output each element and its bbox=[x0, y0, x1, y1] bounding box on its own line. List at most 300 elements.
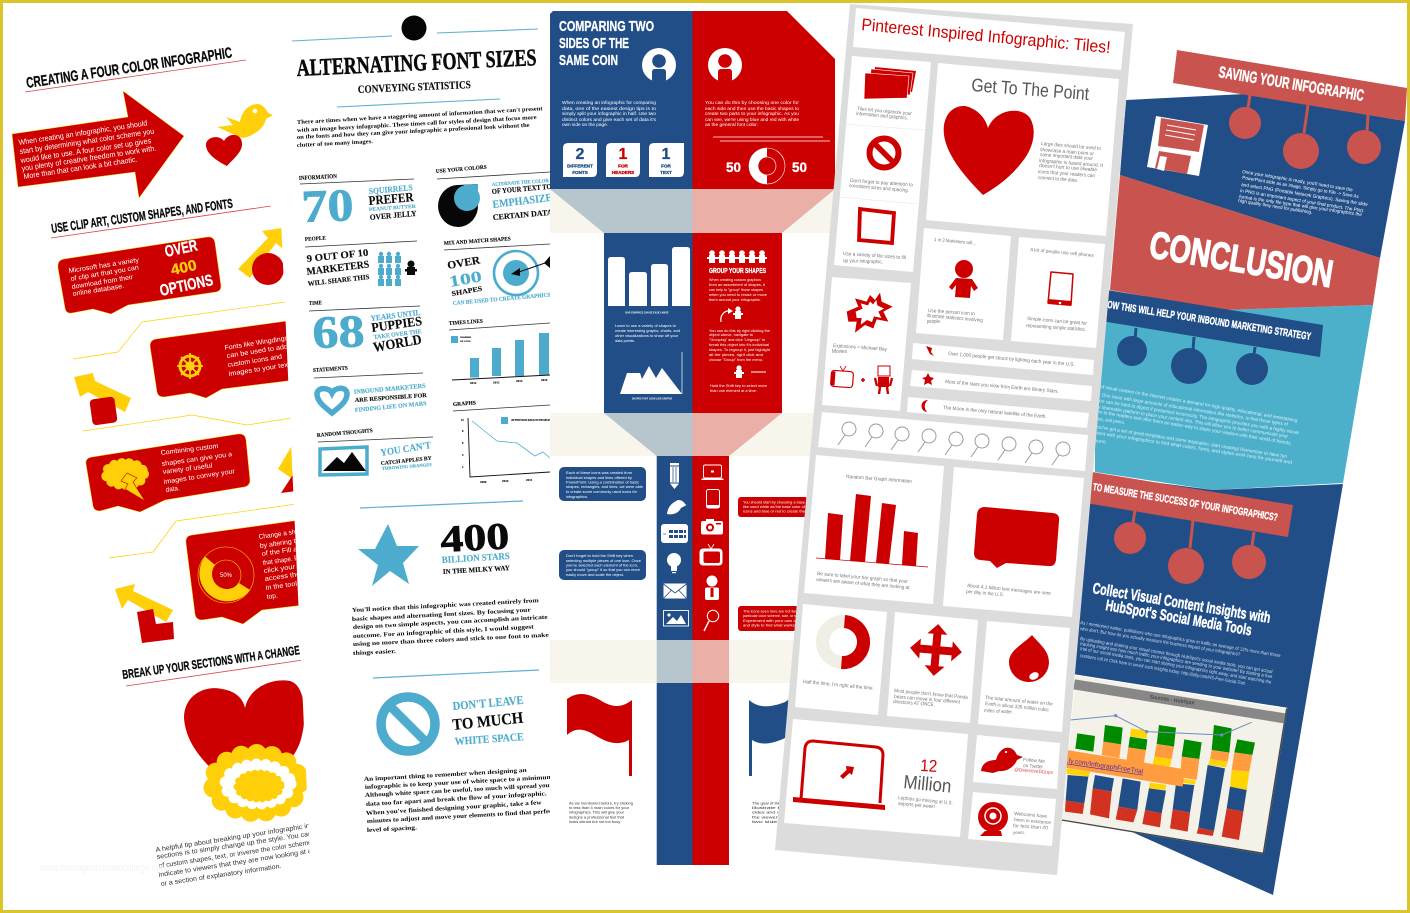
section: information 70: PEANUT BUTTER bbox=[369, 205, 416, 213]
icon: user bbox=[642, 48, 676, 82]
tile: cell phones: Simple icons can be great for bbox=[1027, 316, 1087, 327]
icon: tablet bbox=[706, 490, 720, 508]
red segments bbox=[1065, 788, 1243, 840]
icon: black person bbox=[405, 260, 417, 275]
callout: clip art options: download from their bbox=[71, 274, 134, 291]
icon: target with arrow bbox=[494, 251, 550, 295]
callout: fill and outline bbox=[186, 520, 311, 624]
section: use your colors: CERTAIN DATA bbox=[492, 208, 553, 222]
callout: custom shapes bbox=[86, 434, 250, 512]
callout: red base color note: icons and blue or red to create the bbox=[743, 510, 805, 514]
text block: shapes: other visualizations to show off your bbox=[615, 333, 679, 338]
tile: half donut bbox=[795, 604, 887, 715]
tile: twitter bird: on Twitter bbox=[1023, 763, 1044, 770]
tile: laptops: 12 bbox=[920, 756, 938, 776]
mid panel: red group your shapes: than one element at a time. bbox=[710, 388, 757, 393]
tile: moon fact bbox=[907, 397, 1089, 428]
tile: moon fact: The Moon is the only natural satellite of the Earth. bbox=[943, 405, 1047, 420]
panel: saving your infographic sheet bbox=[1043, 50, 1407, 895]
chart: 50/50 donut: 50 bbox=[726, 159, 741, 175]
tiles: fonts counts: 2 bbox=[576, 146, 585, 163]
text block: hubspot: trial of our social media tools, you can start sharing your infographics right away, and start watching the bbox=[1080, 646, 1272, 686]
icon: picture bbox=[664, 610, 688, 626]
bar chart: times lines: 2014 bbox=[516, 379, 523, 383]
text block: left footer: to less than 4 main colors for your bbox=[569, 806, 630, 810]
mid panel: red group your shapes: Hold the Shift key to select more bbox=[710, 383, 767, 388]
title: comparing two sides: COMPARING TWO bbox=[559, 18, 654, 35]
section: statements bbox=[313, 366, 428, 414]
tile: get to the point: some important data your bbox=[1040, 152, 1093, 162]
callout: blue icons note: individual shapes and lines offered by bbox=[566, 476, 632, 480]
tiles: fonts counts bbox=[563, 143, 684, 177]
tiles: fonts counts: HEADERS bbox=[612, 170, 634, 175]
icon: magnifier bbox=[704, 610, 719, 631]
section: information 70: SQUIRRELS bbox=[368, 182, 413, 196]
text block: saving bbox=[1238, 169, 1368, 218]
tile: water drop: Earth is about 326 million cubic bbox=[985, 701, 1050, 714]
callout: blue shift key note: easily move and scale the object. bbox=[566, 573, 624, 577]
icon: laptop bbox=[702, 465, 724, 480]
text block: basic shapes note: basic shapes and alternating font sizes. By focusing your bbox=[352, 607, 531, 623]
section: information 70: PREFER bbox=[368, 189, 415, 208]
text block: inbound strategy: ly shareable platform to place your content into. This will allow you to better communicate your bbox=[1097, 404, 1289, 440]
icon: pencil bbox=[670, 463, 679, 489]
heading: collect visual content insights bbox=[1091, 580, 1272, 639]
callout: clip art options: online database. bbox=[72, 283, 125, 298]
text block: shapes bbox=[615, 323, 680, 343]
stat: don't leave too much white space bbox=[452, 693, 525, 748]
tile: webcam: for less than 20 bbox=[1013, 823, 1049, 831]
text block: inbound strategy: ment with your infographics to find what colors, fonts, and styles work best for yourself and bbox=[1094, 430, 1293, 466]
orange link banner bbox=[1043, 750, 1185, 787]
red circles with stems bbox=[1229, 95, 1381, 169]
icon: television bbox=[700, 544, 722, 565]
line chart: graphs: 2 bbox=[462, 466, 464, 469]
callout: fill and outline: Change a shape bbox=[258, 527, 307, 541]
text block: inbound strategy: you've got a set of great templates and some inspiration, start creating! Remember to have fun bbox=[1095, 424, 1288, 460]
icon: stacked cards bbox=[864, 67, 916, 99]
bar chart: times lines: TIMES LINES bbox=[449, 319, 483, 327]
tile: text messages: per day in the U.S. bbox=[966, 589, 1004, 598]
tile: four way arrow: directions AT ONCE. bbox=[893, 699, 935, 708]
text block: inbound strategy: . One issue with large amounts of educational information like statistics, is that these types of bbox=[1099, 392, 1289, 428]
text block: hubspot bbox=[1080, 620, 1281, 687]
icon: clipped yellow and red shape bbox=[278, 446, 294, 493]
text block: right footer: The goal of this infographic is to bbox=[752, 802, 812, 806]
banner: saving your infographic bbox=[1173, 50, 1407, 121]
icon: calendar: 31 bbox=[663, 532, 667, 536]
tile: water drop bbox=[978, 621, 1070, 732]
text block: blue intro: data, one of the easiest design tips is to bbox=[562, 106, 656, 112]
trend line bbox=[1070, 714, 1252, 737]
subtitle: conveying statistics: CONVEYING STATISTICS bbox=[358, 79, 471, 96]
section: random thoughts: YOU CAN'T bbox=[380, 440, 432, 459]
section: time 68: WORLD bbox=[372, 333, 423, 356]
tile: half donut: Half the time, I'm right all the time. bbox=[803, 679, 874, 692]
banner: measure the success bbox=[1068, 468, 1293, 537]
tile: marketers person: people. bbox=[927, 319, 941, 325]
icon: light bulb bbox=[667, 553, 681, 573]
orange link banner: http://bit.ly.com/InfographFreeTrial bbox=[1043, 754, 1144, 776]
chart header bbox=[1073, 679, 1285, 723]
text block: hubspot: numbers roll in! Click here to unveil such insights today: http://bitly.com/HS-Free-Social-Tool bbox=[1080, 653, 1245, 687]
section: statements: INBOUND MARKETERS bbox=[354, 383, 426, 396]
title: comparing two sides: SAME COIN bbox=[559, 52, 618, 69]
callout: blue shift key note: you should "group" it so that you can more bbox=[566, 568, 640, 572]
section: people: 9 OUT OF 10 bbox=[306, 248, 369, 265]
icon: no sign bbox=[381, 697, 435, 751]
stat: don't leave too much white space: WHITE SPACE bbox=[454, 731, 524, 748]
callout: fill and outline: that shape. Right bbox=[262, 554, 309, 567]
text block: shapes: Learn to use a variety of shapes to bbox=[615, 323, 676, 328]
section: time 68 bbox=[308, 300, 422, 352]
line chart: graphs: 4 bbox=[462, 454, 464, 457]
callout: wingdings fonts: Fonts like Wingdings bbox=[224, 335, 289, 352]
icon: calendar bbox=[661, 524, 688, 543]
callout: wingdings fonts: can be used to add bbox=[226, 343, 289, 360]
section: random thoughts: THROWING ORANGES bbox=[382, 462, 432, 471]
section: time 68: PUPPIES bbox=[370, 313, 423, 335]
callout: blue shift key note bbox=[559, 550, 646, 580]
icon: tv plus robot bbox=[830, 366, 892, 394]
text block: inbound strategy: ion can be hard to digest if presented incorrectly. The infographic provides you with a highly visual bbox=[1098, 398, 1299, 436]
red arrow callout bbox=[12, 91, 184, 198]
callout: blue icons note: infographics. bbox=[566, 495, 588, 499]
callout: blue icons note: to create some commonly used icons for bbox=[566, 490, 638, 494]
tile: title bbox=[853, 8, 1125, 70]
tile: stars fact bbox=[910, 370, 1092, 401]
callout: blue icons note: Each of these icons was created from bbox=[566, 471, 632, 475]
text block: inbound strategy bbox=[1093, 384, 1299, 466]
tile: get to the point: infographic is based around. It bbox=[1039, 158, 1104, 169]
chart header: Sources - HubSpot bbox=[1149, 694, 1195, 707]
line chart: graphs: 8 bbox=[462, 430, 464, 433]
orange segments bbox=[1102, 742, 1252, 780]
callout: wingdings fonts bbox=[150, 321, 295, 398]
banner: measure the success: HOW TO MEASURE THE SUCCESS OF YOUR INFOGRAPHICS? bbox=[1074, 478, 1279, 524]
watermark: www.heritagechristiancollege.com bbox=[39, 863, 168, 874]
tile column: tips: up your infographic. bbox=[843, 258, 883, 265]
text block: helpful tip: indicate to viewers that they are now looking at a bbox=[158, 848, 313, 879]
line chart: graphs bbox=[453, 400, 550, 484]
callout: red color scheme note: Experiment with your own colors bbox=[743, 619, 805, 623]
text block: helpful tip: or a section of explanatory information. bbox=[160, 863, 282, 888]
stat: 400 billion stars bbox=[440, 524, 510, 574]
section: information 70 bbox=[298, 174, 416, 222]
section: information 70: INFORMATION bbox=[299, 174, 338, 182]
callout: red color scheme note: and style to find what works best. bbox=[743, 624, 805, 628]
section: statements: ARE RESPONSIBLE FOR bbox=[355, 393, 428, 404]
callout: fill and outline: in the tool bar bbox=[265, 579, 311, 592]
section: random thoughts: RANDOM THOUGHTS bbox=[317, 428, 373, 439]
tile: lightning fact bbox=[912, 343, 1094, 375]
icon: man with tie bbox=[705, 576, 719, 600]
stat: 400 billion stars: 400 bbox=[439, 515, 510, 561]
panel: four color infographic sheet bbox=[12, 44, 313, 888]
text block: red intro bbox=[705, 100, 799, 128]
red arrow callout: When creating an infographic, you should bbox=[18, 118, 148, 147]
red arrow callout: you plenty of creative freedom to work with. bbox=[21, 144, 157, 173]
text block: shapes: data points. bbox=[615, 338, 635, 343]
icon: black circle with rules bbox=[292, 16, 538, 41]
tile: cell phones bbox=[1011, 237, 1105, 348]
tile: webcam bbox=[968, 792, 1056, 846]
text block: left footer bbox=[569, 802, 633, 824]
text block: blue intro bbox=[562, 100, 657, 128]
blue circles with stems bbox=[1117, 328, 1268, 385]
line chart: graphs: 2009 bbox=[480, 480, 487, 484]
icon: storm cloud bbox=[106, 463, 145, 501]
heading: collect visual content insights: Collect Visual Content Insights with bbox=[1091, 580, 1272, 627]
section: use your colors: USE YOUR COLORS bbox=[436, 165, 487, 175]
funnel shapes bbox=[550, 189, 835, 683]
icon: blue flag bbox=[749, 692, 800, 776]
callout: custom shapes: images to convey your bbox=[163, 468, 236, 486]
mid panel: blue bars bbox=[604, 233, 692, 413]
tile: twitter bird: @DetectiveDDups bbox=[1014, 767, 1054, 776]
icon: ship wheel bbox=[177, 353, 203, 379]
section: use your colors: EMPHASIZE bbox=[492, 192, 553, 211]
tile: marketers person: illustrate statistics involving bbox=[927, 313, 983, 324]
text block: intro: on the fonts and how they can give your infographic a professional look without the bbox=[297, 123, 530, 141]
tiles: fonts counts: FOR bbox=[618, 164, 629, 168]
text block: saving: PowerPoint slide as an image. Simply go to File -> Save As bbox=[1242, 175, 1360, 200]
tile column: tips: Don't forget to pay attention to bbox=[850, 178, 913, 188]
band: cream strips bbox=[550, 189, 835, 683]
icon: yellow arrow with red square bbox=[74, 373, 131, 426]
callout: red base color note bbox=[738, 497, 808, 517]
heading: use clip art: USE CLIP ART, CUSTOM SHAPES, AND FONTS bbox=[50, 196, 234, 236]
tile column: tips: Use a variety of tile sizes to fill bbox=[843, 251, 906, 261]
text block: saving: format is the only file type that will give your infographics the bbox=[1239, 194, 1363, 218]
tile: get to the point: Large dies should be used to bbox=[1041, 141, 1101, 152]
line chart: graphs: 2011 bbox=[526, 478, 533, 482]
icon: no sign bbox=[870, 138, 898, 168]
icon: mountain area chart bbox=[620, 352, 682, 394]
callout: custom shapes: Combining custom bbox=[160, 443, 219, 457]
callout: fill and outline: by altering the bbox=[259, 537, 304, 550]
section: random thoughts bbox=[317, 428, 433, 475]
line chart: graphs: GRAPHS bbox=[453, 400, 476, 408]
callout: custom shapes: variety of useful bbox=[162, 462, 213, 476]
heading: creating a four color infographic: CREATING A FOUR COLOR INFOGRAPHIC bbox=[25, 44, 233, 92]
tile: title: Pinterest Inspired Infographic: Tiles! bbox=[861, 15, 1111, 57]
icon: red flag bbox=[567, 694, 632, 776]
icon: user bbox=[708, 48, 742, 82]
tile: bar graph: Be sure to label your bar graph so that your bbox=[817, 571, 908, 585]
text block: hubspot: By uploading and sharing your visual content through HubSpot's social media tools, you can get actual bbox=[1080, 636, 1273, 675]
callout: blue icons note bbox=[559, 467, 646, 501]
section: mix and match shapes bbox=[444, 236, 551, 307]
text block: right footer: illustrate two different bbox=[752, 806, 814, 810]
chart: 50 percent donut: 50% bbox=[220, 573, 233, 579]
text block: red intro: each side and then use the basic shapes to bbox=[705, 106, 799, 112]
stat: don't leave too much white space: TO MUCH bbox=[452, 710, 525, 734]
section: people: MARKETERS bbox=[306, 259, 370, 278]
text block: right footer: sides and compare them bbox=[752, 810, 812, 814]
section: use your colors: OF YOUR TEXT TO bbox=[491, 182, 552, 196]
mid panel: red group your shapes bbox=[692, 233, 782, 413]
text block: right footer bbox=[752, 802, 814, 824]
text block: ungroup instructions: "Grouping" and click "Ungroup" to bbox=[709, 337, 765, 342]
section: mix and match shapes: SHAPES bbox=[451, 285, 483, 298]
callout: fill and outline: access those bbox=[264, 570, 309, 583]
section: use your colors: ALTERNATE THE COLOR bbox=[492, 179, 549, 188]
text block: basic shapes note: things easier. bbox=[353, 648, 397, 657]
stat: 400 billion stars: IN THE MILKY WAY bbox=[443, 564, 510, 576]
text block: left footer: As we mentioned before, try sticking bbox=[569, 802, 633, 806]
text block: left footer: infographics. This will give your bbox=[569, 810, 625, 814]
tile: explosions: Movies bbox=[832, 349, 847, 355]
text block: group instructions: them around your infographic. bbox=[709, 297, 761, 302]
text block: white space note: minutes to adjust and move your elements to find that perfect bbox=[367, 808, 556, 825]
tile: get to the point: icons that your readers can bbox=[1038, 169, 1095, 179]
text block: basic shapes note: You'll notice that this infographic was created entirely from bbox=[352, 597, 540, 614]
line chart: graphs: 10 bbox=[461, 419, 464, 422]
icon: person and dash bbox=[734, 365, 766, 378]
callout: blue icons note: shapes, rectangles, and lines, we were able bbox=[566, 485, 643, 489]
tile: laptops: Million bbox=[903, 772, 952, 798]
callout: clip art options: 400 bbox=[169, 257, 198, 279]
tile column: tips: consistent sizes and spacing. bbox=[849, 183, 909, 194]
icon: camera bbox=[701, 519, 723, 534]
text block: basic shapes note: design on two simple aspects, you can accomplish an intricate bbox=[353, 614, 548, 631]
text block: helpful tip bbox=[155, 822, 313, 888]
callout: wingdings fonts: custom icons and bbox=[227, 353, 283, 369]
bar chart: times lines: 2015 bbox=[541, 378, 548, 382]
callout: clip art options bbox=[58, 237, 221, 314]
icon: blue star bbox=[358, 524, 419, 586]
text block: right footer: the viewers. By showing bbox=[752, 816, 812, 820]
center columns: lower blue and red bbox=[657, 683, 729, 865]
section: people: PEOPLE bbox=[305, 236, 326, 243]
tiles: fonts counts: 1 bbox=[662, 146, 671, 163]
text block: inbound strategy: ues, and peers. bbox=[1096, 416, 1125, 426]
tile: laptops: Laptops go missing at U.S. bbox=[898, 795, 953, 807]
tile column: tips bbox=[834, 56, 931, 272]
callout: red color scheme note bbox=[738, 606, 808, 631]
callout: blue shift key note: you've selected each element of the icon, bbox=[566, 564, 638, 568]
section: dark blue lower background bbox=[1060, 470, 1343, 895]
text block: basic shapes note: outcome. For an infographic of this style, I would suggest bbox=[353, 623, 535, 640]
bar chart: times lines bbox=[449, 319, 550, 385]
icon: people grid bbox=[378, 252, 401, 286]
red arrow callout: would like to use. A four color set up gives bbox=[19, 136, 152, 165]
bar chart: times lines: 2013 bbox=[493, 380, 500, 384]
panel: pinterest tiles sheet bbox=[775, 4, 1133, 875]
callout: clip art options: OPTIONS bbox=[158, 272, 215, 300]
text block: ungroup instructions: choose "Group" from the menu. bbox=[709, 357, 763, 362]
text block: basic shapes note: using no more than three colors and stick to one font to make bbox=[353, 632, 549, 648]
line chart: graphs: 6 bbox=[462, 442, 464, 445]
text block: blue intro: simply split your infographic in half. Use two bbox=[562, 111, 656, 117]
text block: ungroup instructions: object above, navigate to bbox=[709, 332, 753, 337]
section: mix and match shapes: MIX AND MATCH SHAPES bbox=[444, 236, 511, 247]
tile: get to the point: Get To The Point bbox=[971, 74, 1090, 104]
stat: don't leave too much white space: DON'T LEAVE bbox=[452, 693, 524, 713]
text block: intro bbox=[297, 106, 543, 149]
tiles: fonts counts: FOR bbox=[661, 164, 672, 168]
text block: hubspot: tracking insight into how much traffic your infographics are sending to your website! By starting a free bbox=[1080, 641, 1273, 680]
tile: get to the point: connect to the data. bbox=[1038, 175, 1078, 184]
tile: water drop: miles of water. bbox=[984, 708, 1013, 716]
red arrow callout: More than that can look a bit chaotic. bbox=[23, 155, 138, 181]
text block: group instructions: when you need to resize or move bbox=[709, 292, 767, 297]
text block: ungroup instructions: all the pieces, right click and bbox=[709, 352, 763, 357]
callout: red color scheme note: The icons seen here are not tied to a bbox=[743, 610, 806, 614]
tile: laptops: airports per week! bbox=[898, 801, 935, 810]
section: conclusion band bbox=[1110, 175, 1380, 310]
tiles: fonts counts: FONTS bbox=[572, 170, 588, 175]
tile column: tips: information and graphics. bbox=[856, 111, 908, 122]
tile: marketers person: Use the person icon to bbox=[928, 308, 975, 317]
tile: twitter bird bbox=[973, 735, 1060, 789]
callout: red base color note: like used white as the base color of bbox=[743, 505, 806, 509]
tile: marketers person bbox=[916, 228, 1011, 340]
text block: white space note: infographic is to keep your use of white space to a minimum bbox=[365, 774, 554, 791]
icon: square frame bbox=[859, 209, 894, 243]
tile: bar graph: viewers are aware of what they are looking at. bbox=[816, 577, 911, 591]
callout: fill and outline: top. bbox=[266, 593, 278, 601]
chart: 50/50 donut: 50 bbox=[792, 159, 807, 175]
bar chart bbox=[816, 494, 928, 567]
heading: collect visual content insights: HubSpot's Social Media Tools bbox=[1104, 597, 1253, 639]
callout: blue shift key note: selecting multiple pieces of one icon. Once bbox=[566, 559, 641, 563]
tile: twitter bird: Follow Me bbox=[1023, 757, 1046, 765]
tile: four way arrow bbox=[887, 612, 978, 723]
tile: get to the point: showcase a main point or bbox=[1040, 147, 1094, 157]
text block: white space note: An important thing to remember when designing an bbox=[364, 767, 528, 783]
text block: blue intro: When creating an infographic for comparing bbox=[562, 100, 656, 106]
red arrow callout: start by determining what color scheme you bbox=[19, 127, 155, 156]
chart: 50/50 donut bbox=[726, 148, 807, 184]
callout: fill and outline: of the Fill and bbox=[261, 545, 306, 558]
tile: lightning fact: Over 1,000 people get struck by lighting each year in the U.S. bbox=[948, 351, 1075, 368]
section: conclusion band: CONCLUSION bbox=[1147, 224, 1336, 296]
text block: ungroup instructions bbox=[709, 328, 771, 362]
tile: cell phones: A lot of people use cell phones bbox=[1030, 247, 1095, 259]
panel: alternating font sizes sheet bbox=[292, 16, 556, 834]
text block: hubspot: As I mentioned earlier, publishers who use infographics grow in traffic an average of 12% more than those bbox=[1080, 620, 1281, 659]
text block: intro: There are times when we have a staggering amount of information that we can't present bbox=[297, 106, 543, 126]
callout: red color scheme note: particular color scheme, size, or shape. bbox=[743, 614, 805, 618]
text block: white space note: Although white space can be useful, too much will spread your bbox=[365, 782, 553, 799]
text block: red intro: can see, we're using blue and red with white bbox=[705, 117, 799, 123]
text block: group instructions bbox=[709, 277, 767, 302]
tile: get to the point bbox=[926, 63, 1119, 236]
green segments bbox=[1075, 725, 1255, 759]
tile: marketers person: 1 in 3 Marketers will... bbox=[934, 237, 976, 247]
text block: hubspot: who don't. But how do you actually measure the business impact of your infographics? bbox=[1080, 626, 1241, 658]
icon column: blue bbox=[657, 456, 692, 640]
tile: water drop: The total amount of water on the bbox=[985, 695, 1053, 708]
text block: intro: with an image heavy infographic. These times call for styles of design that focus more bbox=[297, 115, 537, 134]
text block: red intro: create two parts to your infographic. As you bbox=[705, 111, 799, 117]
tile: webcam: Webcams have bbox=[1014, 811, 1048, 820]
icon: person bbox=[949, 260, 978, 298]
text block: saving: and select PNG (Portable Network Graphics). Saving the slide bbox=[1241, 182, 1368, 208]
text block: white space note: When you've finished designing your graphic, take a few bbox=[366, 799, 542, 817]
text block: blue intro: own side on the page. bbox=[562, 122, 608, 128]
mid panel: blue bars: BAR GRAPHICS CAN BE EASILY MADE bbox=[626, 310, 668, 314]
icon: explosion bbox=[847, 293, 893, 333]
text block: right footer: two sides with data. bbox=[752, 820, 812, 824]
text block: ungroup instructions: break this object into it's individual bbox=[709, 342, 769, 347]
callout: wingdings fonts: images to your text bbox=[228, 361, 291, 378]
section: use your colors bbox=[436, 165, 553, 227]
banner: inbound marketing strategy bbox=[1095, 288, 1323, 357]
panel: comparing two sides sheet bbox=[550, 11, 835, 865]
